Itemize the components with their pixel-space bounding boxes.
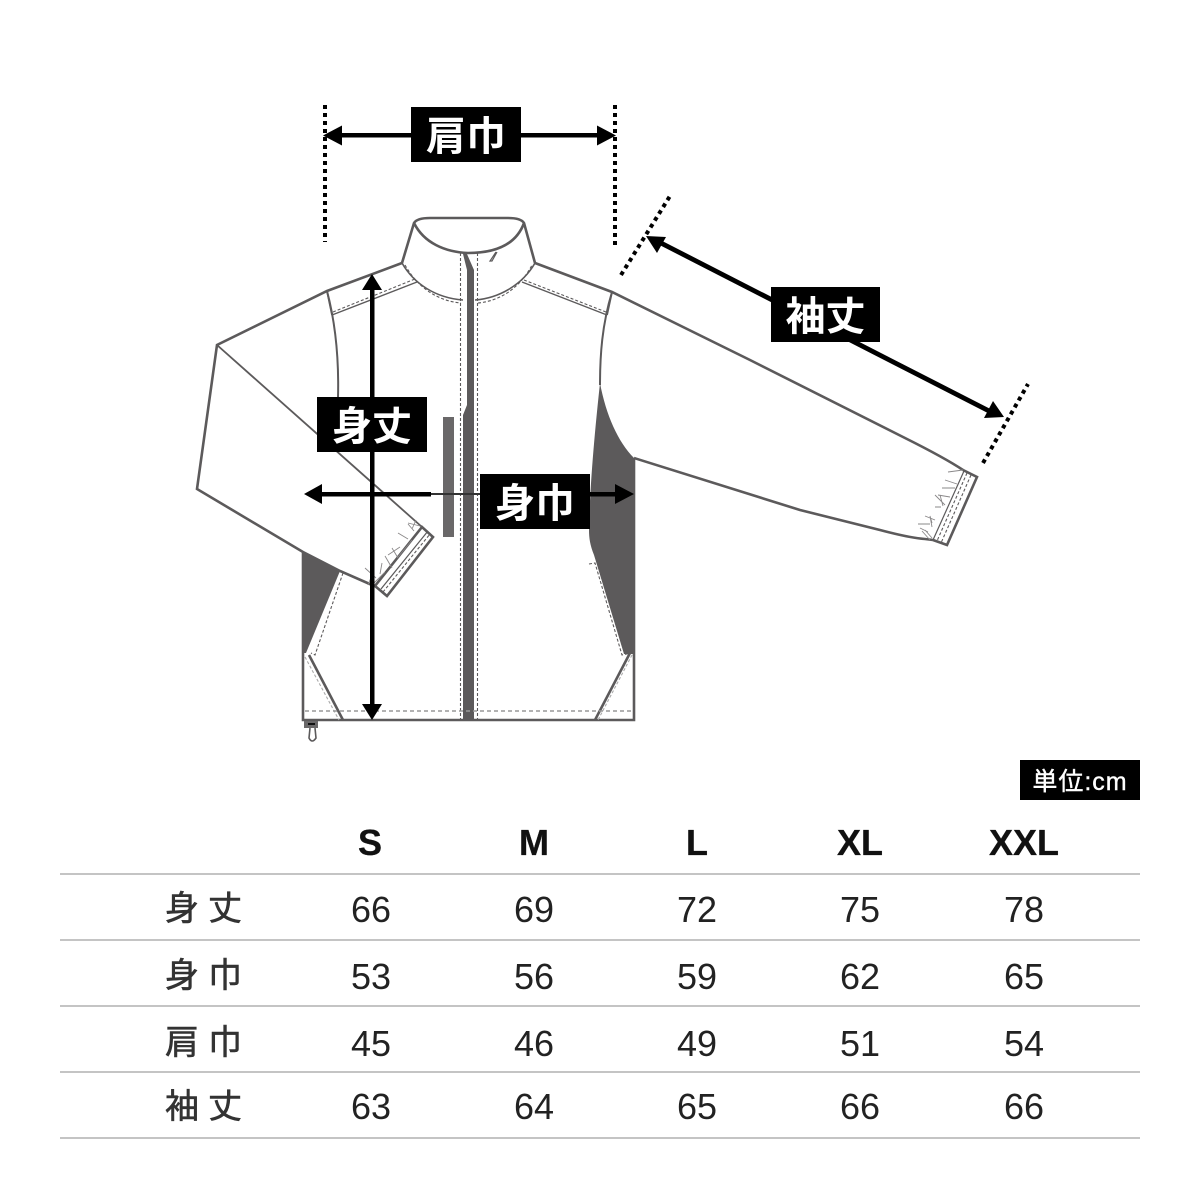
measure: body length: [317, 274, 427, 720]
row: sleeve length: 63: [351, 1086, 391, 1127]
row: body width: 53: [351, 956, 391, 997]
chest pocket zipper: [443, 417, 454, 537]
row: body length: [165, 889, 1044, 930]
shoulder yokes and armholes: [327, 279, 612, 398]
row: shoulder width: 45: [351, 1023, 391, 1064]
row: body length: 69: [514, 889, 554, 930]
center front zipper: [460, 253, 478, 720]
row: body width: 62: [840, 956, 880, 997]
row: body width: [165, 956, 1044, 997]
row: sleeve length: 66: [1004, 1086, 1044, 1127]
measure: sleeve length: [621, 196, 1028, 463]
jacket body outline: [303, 458, 634, 720]
jacket technical drawing: [197, 218, 977, 741]
row: shoulder width: 49: [677, 1023, 717, 1064]
drawcord toggle: [304, 721, 318, 741]
size table: [60, 822, 1140, 1139]
row: body width: 身巾: [165, 957, 251, 995]
row: body length: 身丈: [165, 890, 251, 928]
lower left pocket: [305, 573, 343, 720]
measure: body length: 身丈: [332, 405, 412, 449]
row: shoulder width: 肩巾: [165, 1024, 251, 1062]
table header: [358, 822, 1059, 863]
measure: shoulder width: [323, 105, 616, 245]
hem stitching: [305, 710, 632, 712]
measure: sleeve length: 袖丈: [786, 295, 866, 339]
side panel: left dark gusset: [303, 552, 340, 653]
row: body width: 59: [677, 956, 717, 997]
measure: body width: [304, 474, 634, 529]
row: sleeve length: [165, 1086, 1044, 1127]
row: shoulder width: 46: [514, 1023, 554, 1064]
row: sleeve length: 袖丈: [165, 1088, 251, 1126]
row: body width: 65: [1004, 956, 1044, 997]
row: sleeve length: 66: [840, 1086, 880, 1127]
unit badge: 単位:cm: [1032, 768, 1128, 796]
unit badge: [1020, 760, 1140, 800]
table header: L: [686, 822, 708, 863]
row: body length: 66: [351, 889, 391, 930]
row: sleeve length: 65: [677, 1086, 717, 1127]
row: body length: 72: [677, 889, 717, 930]
right sleeve: [535, 263, 977, 545]
measure: shoulder width: 肩巾: [426, 115, 506, 159]
row: body length: 75: [840, 889, 880, 930]
row: shoulder width: [165, 1023, 1044, 1064]
row: shoulder width: 54: [1004, 1023, 1044, 1064]
row: body width: 56: [514, 956, 554, 997]
lower right pocket: [589, 563, 632, 720]
table header: XXL: [989, 822, 1059, 863]
row: sleeve length: 64: [514, 1086, 554, 1127]
measure: body width: 身巾: [495, 482, 575, 526]
row: body length: 78: [1004, 889, 1044, 930]
left sleeve: [197, 263, 433, 596]
table header: M: [519, 822, 549, 863]
table header: XL: [837, 822, 883, 863]
table header: S: [358, 822, 382, 863]
row: shoulder width: 51: [840, 1023, 880, 1064]
side panel: right dark gusset: [589, 383, 634, 654]
collar: [402, 218, 535, 303]
